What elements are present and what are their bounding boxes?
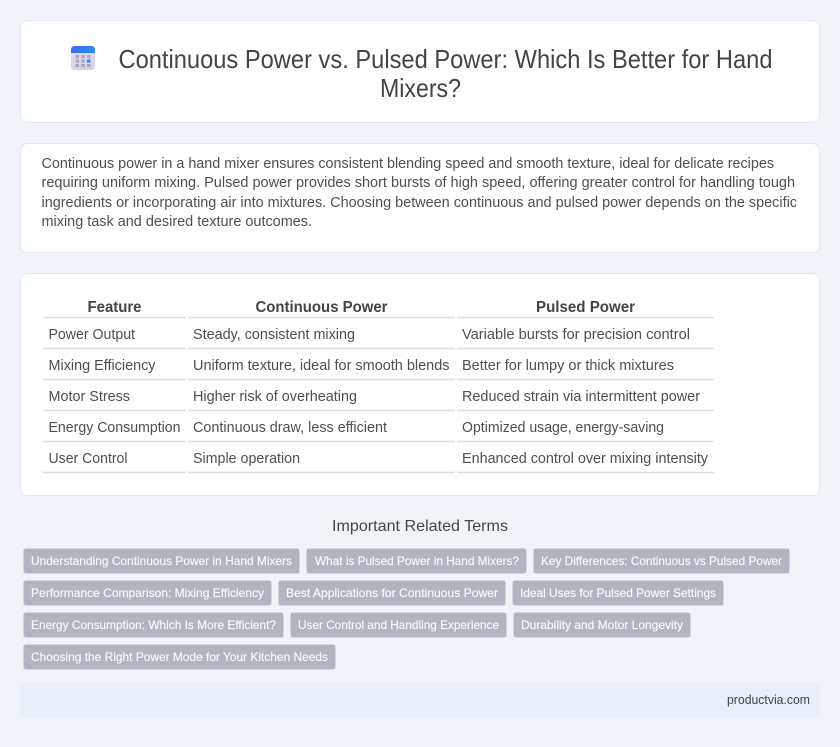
table row: mixing efficiency — [48, 358, 674, 374]
table header row: Continuous Power — [256, 299, 388, 316]
tag — [278, 580, 506, 606]
table row: user control — [48, 451, 709, 467]
table row: mixing efficiency: Uniform texture, ideal for smooth blends — [193, 358, 450, 374]
table row: user control: Simple operation — [193, 451, 300, 467]
footer source text: productvia.com — [727, 692, 810, 707]
table row: mixing efficiency: Mixing Efficiency — [48, 358, 156, 374]
table row: power output: Variable bursts for precision control — [462, 327, 690, 343]
table row: energy consumption: Energy Consumption — [48, 420, 180, 436]
panel: introduction — [20, 144, 820, 252]
tag — [290, 612, 506, 638]
panel: related term tags — [24, 548, 790, 670]
table header row: Pulsed Power — [536, 299, 635, 316]
tag: User Control and Handling Experience — [298, 618, 499, 632]
tag — [514, 612, 690, 638]
table row: energy consumption: Optimized usage, energy-saving — [462, 420, 664, 436]
tag — [24, 548, 300, 574]
tag: What is Pulsed Power in Hand Mixers? — [315, 554, 519, 568]
heading: important related terms: Important Related Terms — [332, 518, 508, 535]
table row: energy consumption: Continuous draw, less efficient — [193, 420, 387, 436]
table row: power output — [48, 327, 690, 343]
table row: user control: User Control — [48, 451, 128, 467]
table row: user control: Enhanced control over mixing intensity — [462, 451, 709, 467]
table row: power output: Steady, consistent mixing — [193, 327, 355, 343]
icon: calendar — [71, 46, 95, 70]
title: Mixers? — [380, 75, 461, 103]
tag — [24, 644, 336, 670]
tag: Understanding Continuous Power in Hand Mixers — [31, 554, 292, 568]
table row: motor stress: Reduced strain via intermittent power — [462, 389, 700, 405]
table row: motor stress — [48, 389, 700, 405]
tag: Key Differences: Continuous vs Pulsed Power — [541, 554, 782, 568]
tag — [512, 580, 724, 606]
tag: Energy Consumption: Which Is More Efficient? — [31, 618, 276, 632]
tag: Best Applications for Continuous Power — [286, 586, 498, 600]
title: Continuous Power vs. Pulsed Power: Which Is Better for Hand — [118, 46, 772, 74]
table row: mixing efficiency: Better for lumpy or thick mixtures — [462, 358, 674, 374]
table header row: Feature — [88, 299, 142, 316]
text block: introduction paragraph: mixing task and desired texture outcomes. — [42, 214, 312, 230]
text block: introduction paragraph: Continuous power in a hand mixer ensures consistent blending speed and smooth texture, ideal for delicate recipes — [42, 156, 774, 172]
tag: Performance Comparison: Mixing Efficiency — [31, 586, 264, 600]
tag: Durability and Motor Longevity — [521, 618, 683, 632]
text block: introduction paragraph: ingredients or incorporating air into mixtures. Choosing between continuous and pulsed power depends on the specific — [42, 195, 797, 211]
table row: power output: Power Output — [48, 327, 135, 343]
table row: motor stress: Motor Stress — [48, 389, 130, 405]
tag — [534, 548, 790, 574]
table row: motor stress: Higher risk of overheating — [193, 389, 357, 405]
footer bar — [20, 683, 820, 717]
title — [118, 46, 772, 103]
tag: Choosing the Right Power Mode for Your Kitchen Needs — [31, 650, 328, 664]
tag — [24, 612, 284, 638]
panel: title header — [20, 20, 820, 122]
tag — [24, 580, 272, 606]
tag — [306, 548, 526, 574]
table header row — [88, 299, 635, 316]
table row: energy consumption — [48, 420, 664, 436]
text block: introduction paragraph: requiring uniform mixing. Pulsed power provides short bursts of high speed, offering greater control for handling tough — [42, 175, 795, 191]
panel: comparison table — [20, 274, 820, 496]
tag: Ideal Uses for Pulsed Power Settings — [520, 586, 716, 600]
text block: introduction paragraph — [42, 156, 797, 230]
